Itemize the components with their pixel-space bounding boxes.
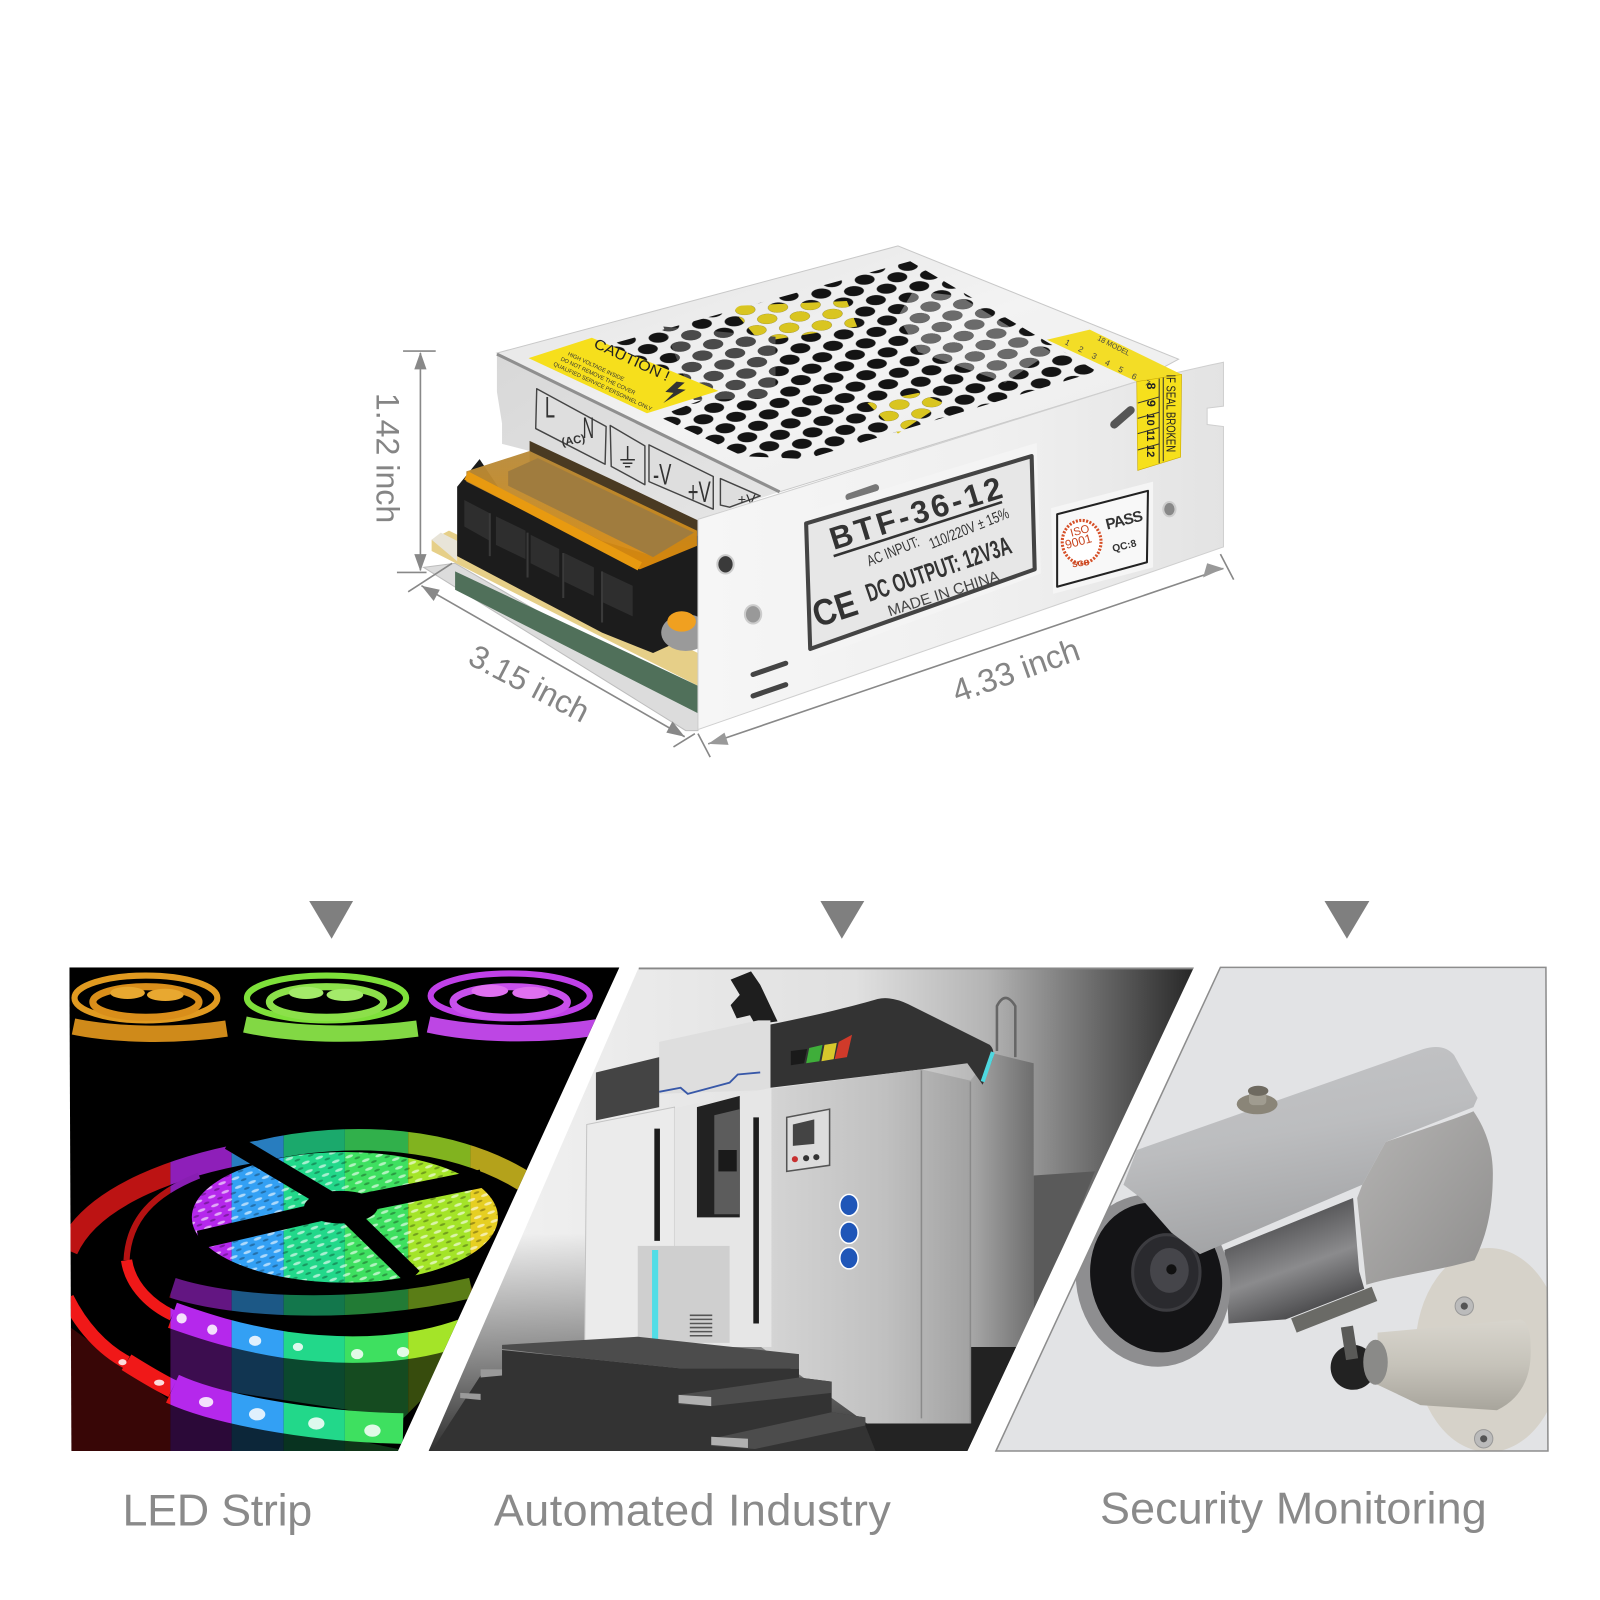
green reel [245,976,417,1034]
top gadget [731,971,778,1024]
reel spokes [199,1141,482,1278]
camera barrel [1224,1198,1364,1323]
stair platform [432,1350,876,1451]
orange terminal cover [466,451,697,569]
label: Automated Industry: Automated Industry [494,1485,891,1536]
orange reel [73,976,227,1034]
panel: automated industry photo [429,967,1204,1451]
side holes and slits [717,410,1176,696]
caution sticker: HIGH VOLTAGE INSIDE [567,351,625,383]
dimension: width 4.33 inch: 4.33 inch [947,631,1084,710]
model label: 110/220V ± 15% [927,505,1012,553]
caution sticker: CAUTION ! [591,336,672,385]
dimension: height 1.42 inch [370,351,436,572]
terminal block [457,459,698,653]
large reel colour bands [70,1129,526,1451]
dark left box [596,1057,659,1120]
perforation holes [608,261,1097,459]
model label: DC OUTPUT: 12V3A [862,532,1015,608]
seal sticker: IF SEAL BROKEN [1163,374,1178,452]
wall mount plate [1417,1248,1547,1450]
model label [800,443,1041,661]
terminal label text: ⏚ [616,443,639,473]
control box [787,1109,830,1171]
caution sticker: QUALIFIED SERVICE PERSONNEL ONLY [552,362,653,413]
seal sticker: 18 MODEL [1096,334,1131,358]
caution sticker [529,336,718,413]
seal sticker: 12 [1144,445,1156,457]
camera front black [1090,1203,1222,1352]
QC pass label: 9001 [1063,531,1094,552]
model label: AC INPUT: [865,534,922,570]
camera front ring [1076,1195,1230,1367]
cyan roof light [983,1052,993,1082]
dimension: depth 3.15 inch: 3.15 inch [463,638,595,729]
door seam [921,1070,970,1427]
white tower [659,1020,770,1094]
handle rail [997,998,1015,1057]
interior behind lid [530,441,698,551]
floor [866,1424,972,1451]
metal front face [497,354,780,534]
QC pass label: SGS [1071,558,1090,569]
caution sticker: DO NOT REMOVE THE COVER [559,357,636,397]
camera shroud [1123,1047,1478,1254]
side panel [698,362,1223,730]
status lights [791,1035,852,1065]
arrow: automated industry [820,901,864,939]
QC pass label [1051,482,1153,594]
terminal label text: N [583,413,594,445]
arrow: security monitoring [1324,901,1369,939]
centre opening [657,1088,771,1347]
top plate [497,246,1179,492]
terminal label text: L [545,392,555,425]
seal sticker: 9 [1144,400,1158,407]
QC pass label: PASS [1104,508,1145,533]
black roof [770,998,993,1088]
right block [970,1053,1034,1347]
QC pass label: ISO [1069,523,1091,540]
camera lens [1133,1235,1200,1310]
mount arm [1378,1329,1530,1410]
shroud bolt [1237,1086,1278,1114]
purple reel [429,973,602,1033]
dimension: depth 3.15 inch [408,563,695,747]
arrow: LED strip [309,901,353,939]
seal sticker: 1 2 3 4 5 6 7 [1063,338,1155,390]
base tray [423,563,698,731]
blue tower line [659,1072,760,1094]
terminal labels [536,389,760,509]
model label: MADE IN CHINA [886,568,1002,620]
seal sticker: 8 [1144,383,1158,390]
model label: BTF-36-12 [825,469,1006,557]
terminal label text [545,392,756,509]
model label: CE [807,582,863,635]
seal sticker [1047,330,1182,470]
main body [758,1069,970,1430]
terminal label text: -V [653,460,672,492]
circuit board [432,531,698,713]
seal sticker: 10 [1144,413,1156,426]
label: Security Monitoring: Security Monitoring [1100,1482,1487,1533]
upper frame line [639,967,1194,969]
potentiometer [661,611,710,651]
reel hub [304,1191,378,1223]
left door [585,1107,674,1341]
safety icons [840,1194,858,1269]
terminal label text: +V [738,492,756,508]
lower cabinet [638,1246,730,1343]
power supply product photo [423,246,1223,731]
camera rear body [1357,1111,1493,1285]
seal sticker: 11 [1144,430,1156,441]
stair tops [460,1337,865,1449]
label: LED Strip: LED Strip [122,1485,312,1536]
ball joint [1294,1294,1388,1390]
panel: LED strip photo [61,959,633,1459]
terminal label text: +V [688,477,711,509]
dimension: height 1.42 inch: 1.42 inch [370,393,406,523]
panel outline: security monitoring [996,967,1548,1451]
LED chips [118,1313,409,1437]
plate front edge highlight [497,354,780,492]
QC pass label: QC:8 [1111,538,1138,555]
panel: security monitoring photo [996,967,1562,1452]
terminal label text: (AC) [561,433,586,449]
dimension: width 4.33 inch [698,554,1234,757]
